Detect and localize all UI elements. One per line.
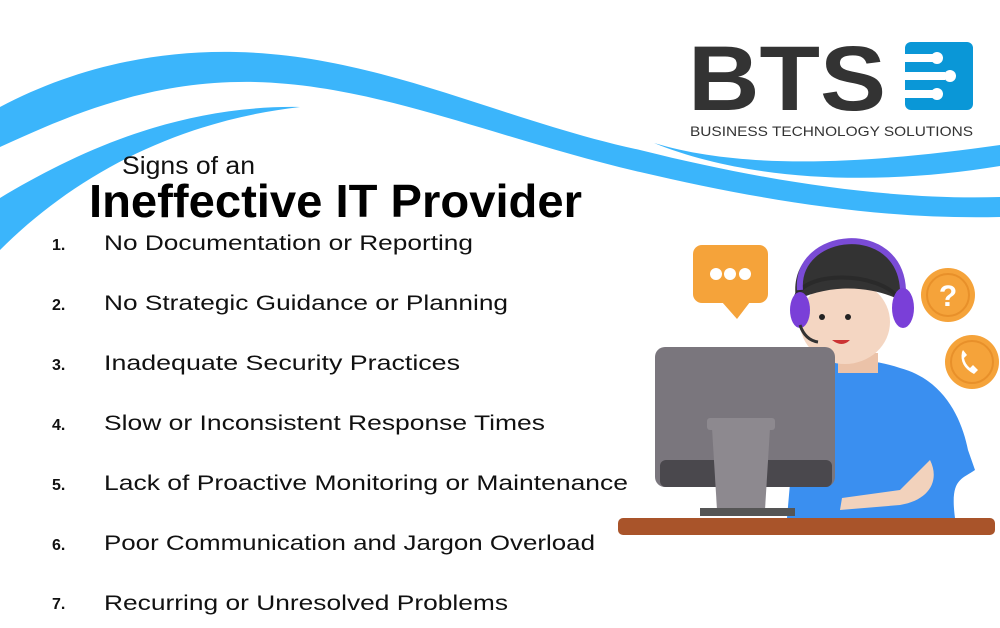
item 5: Lack of Proactive Monitoring or Maintenance (104, 472, 628, 495)
logo text BTS: BTS (688, 28, 886, 130)
item 2: 2. (52, 297, 65, 314)
icon: question mark: ? (939, 280, 957, 313)
item 1: No Documentation or Reporting (104, 232, 473, 255)
item 3: Inadequate Security Practices (104, 352, 460, 375)
icon: question mark (921, 268, 975, 322)
icon: chat bubble (693, 245, 768, 319)
item 7: Recurring or Unresolved Problems (104, 592, 508, 615)
item 6: Poor Communication and Jargon Overload (104, 532, 595, 555)
icon: phone (945, 335, 999, 389)
title: Ineffective IT Provider (89, 175, 582, 227)
logo icon (905, 42, 973, 110)
item 4: Slow or Inconsistent Response Times (104, 412, 545, 435)
item 3: 3. (52, 357, 65, 374)
illustration: support agent at computer (618, 241, 999, 535)
item 7: 7. (52, 596, 65, 613)
wave: main blue band (0, 52, 1000, 217)
list of signs (52, 232, 628, 615)
desk (618, 518, 995, 535)
wave: right crescent under logo (654, 143, 1000, 178)
item 6: 6. (52, 537, 65, 554)
item 1: 1. (52, 237, 65, 254)
item 5: 5. (52, 477, 65, 494)
item 4: 4. (52, 417, 65, 434)
subtitle: Signs of an (122, 152, 255, 180)
item 2: No Strategic Guidance or Planning (104, 292, 508, 315)
logo (688, 28, 973, 139)
wave: left crescent (0, 107, 300, 250)
item 3 (52, 352, 460, 375)
person (787, 241, 975, 518)
monitor (655, 347, 835, 516)
logo tagline: BUSINESS TECHNOLOGY SOLUTIONS (690, 123, 973, 139)
